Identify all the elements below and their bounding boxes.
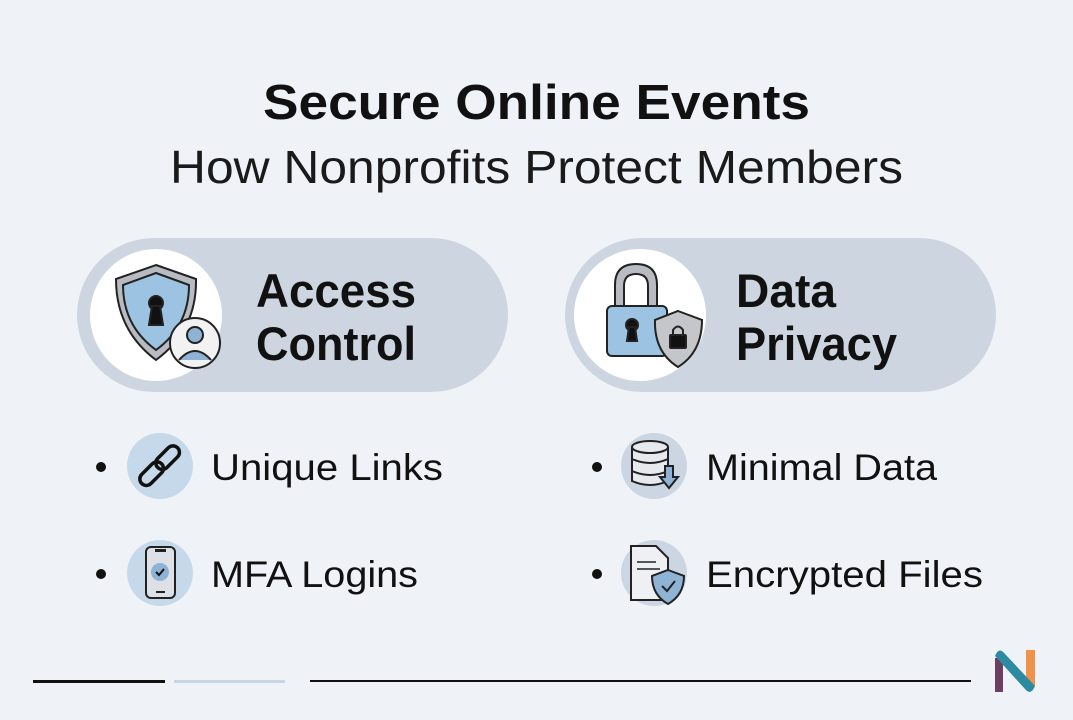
item: minimal data: Minimal Data: [706, 447, 937, 488]
icon: file with shield: [631, 546, 684, 604]
icon: link: [137, 443, 182, 488]
item: unique links: Unique Links: [211, 447, 443, 488]
item: MFA logins: MFA Logins: [211, 554, 418, 595]
logo: [995, 650, 1035, 692]
panel: access control: [77, 238, 508, 392]
icon: padlock with shield: [607, 264, 702, 367]
item: MFA logins: [96, 540, 418, 606]
panel: data privacy: Data: [736, 264, 837, 317]
item: unique links: [96, 433, 443, 499]
item: encrypted files: [592, 540, 983, 606]
icon: database with arrow: [632, 441, 678, 488]
item: encrypted files: Encrypted Files: [706, 554, 983, 595]
icon: shield with keyhole and user: [116, 265, 220, 368]
icon: phone with check: [146, 547, 175, 598]
subtitle: How Nonprofits Protect Members: [170, 141, 903, 193]
panel: access control: Access: [256, 264, 416, 317]
panel: data privacy: Privacy: [736, 317, 897, 370]
footer lines: [33, 680, 971, 683]
panel: data privacy: [565, 238, 996, 392]
title: Secure Online Events: [263, 76, 810, 130]
panel: access control: Control: [256, 317, 416, 370]
item: minimal data: [592, 433, 937, 499]
